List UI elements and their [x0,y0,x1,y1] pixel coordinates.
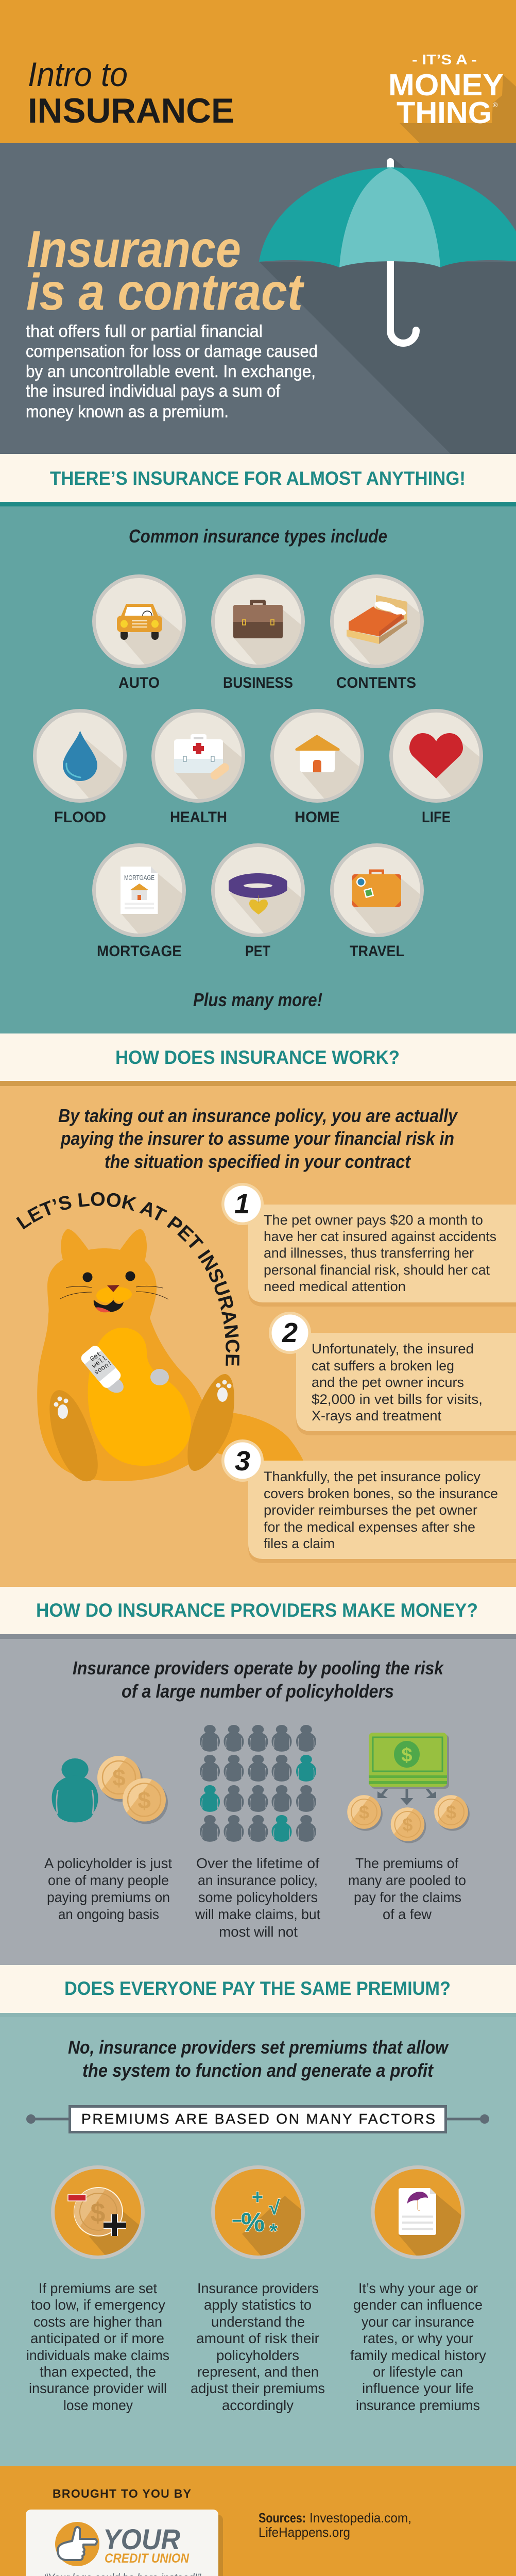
logo shadow [400,75,516,143]
icon: business [211,574,305,668]
text block: policyholder: A policyholder is just [44,1855,172,1871]
sources: Investopedia.com, [309,2510,411,2526]
heading band: does everyone pay the same [0,1965,516,2017]
text block: definition: the insured individual pays a sum of [26,381,281,400]
label: business: BUSINESS [223,674,293,691]
icon: mortgage [92,843,186,937]
text block: definition [26,321,318,421]
subheading: pooling the risk: Insurance providers operate by pooling the risk [73,1657,444,1679]
subheading: pooling the risk: of a large number of policyholders [122,1681,394,1702]
text block: statistics [191,2280,325,2413]
icon: life [389,709,483,803]
text block: pooled premiums: The premiums of [355,1855,458,1871]
logo: It's a Money Thing: ® [493,101,498,109]
icon: policyholder with coins: $ [112,1764,126,1791]
icon: money pool: $ [359,1802,369,1823]
subheading: taking out a policy: the situation specified in your contract [105,1151,411,1172]
text block: age and gender: your car insurance [362,2314,474,2330]
card: credit union logo: CREDIT UNION [105,2551,190,2566]
label: flood: FLOOD [54,809,106,826]
curved heading: let's look at pet insurance: LET’S LOOK AT PET INSURANCE [16,1192,239,1366]
icon: pet [211,843,305,937]
text block: age and gender [350,2280,486,2413]
card 3: reimbursement: 3 [235,1446,250,1477]
icon: money pool [347,1733,470,1843]
title: Intro to [28,55,128,93]
icon: math symbols: √ [269,2197,280,2219]
text block: premiums too low: too low, if emergency [31,2297,165,2313]
heading band: insurance for almost anything [0,454,516,506]
card 3: reimbursement: covers broken bones, so the insurance [264,1486,498,1501]
card 2: broken leg: and the pet owner incurs [312,1375,464,1390]
cast: get well soon: soon! [93,1359,114,1377]
sources: LifeHappens.org [259,2524,350,2540]
text block: policyholder: one of many people [48,1872,169,1888]
icon: policyholder with coins: $ [137,1787,151,1814]
panel: hero insurance is a contract [0,143,516,454]
panel: footer [0,2466,516,2576]
icon: mortgage: MORTGAGE [124,874,154,882]
heading band: how do providers make money [0,1587,516,1639]
card 1: pet owner pays: 1 [234,1189,250,1219]
label: contents: CONTENTS [336,674,416,691]
text block: premiums too low [26,2280,169,2413]
heading band: does everyone pay the same: DOES EVERYONE PAY THE SAME PREMIUM? [64,1978,451,1999]
card 3: reimbursement: for the medical expenses after she [264,1519,475,1535]
card 3: reimbursement: Thankfully, the pet insurance policy [264,1469,480,1484]
icon: money pool: $ [401,1744,412,1766]
card 2: broken leg: 2 [282,1317,298,1348]
icon: money pool: $ [402,1814,413,1835]
icon: money pool: $ [446,1802,456,1823]
label: health: HEALTH [170,809,227,826]
icon: health [151,709,245,803]
label: mortgage: MORTGAGE [97,943,182,960]
card 1: pet owner pays: need medical attention [264,1279,406,1294]
card: credit union logo: YOUR [103,2523,181,2555]
icon: grid of policyholders [200,1725,316,1842]
text block: policyholder [44,1855,172,1922]
panel: premiums [0,2017,516,2466]
text block: pooled premiums: pay for the claims [354,1889,461,1905]
heading: insurance is a contract: is a contract [26,263,304,321]
subheading: taking out a policy [58,1105,458,1172]
title: INSURANCE [28,91,234,130]
text block: age and gender: It’s why your age or [358,2280,478,2296]
text block: pooled premiums [348,1855,466,1922]
card 3: reimbursement: provider reimburses the pet owner [264,1502,477,1518]
text block: statistics: amount of risk their [196,2330,319,2346]
text block: lifetime of policy: most will not [219,1924,298,1940]
cast: get well soon: well [91,1354,108,1370]
card 1: pet owner pays: The pet owner pays $20 a month to [264,1212,483,1228]
text block: lifetime of policy: Over the lifetime of [196,1855,319,1871]
text block: policyholder: an ongoing basis [58,1906,159,1922]
text block: pooled premiums: of a few [383,1906,432,1922]
heading band: how does insurance work [0,1033,516,1086]
text block: statistics: accordingly [222,2397,294,2413]
text block: definition: money known as a premium. [26,402,229,421]
label: life: LIFE [422,809,451,826]
icon: contents [330,574,424,668]
card 2: broken leg: cat suffers a broken leg [312,1358,454,1374]
subheading: providers set premiums: the system to function and generate a profit [82,2060,434,2081]
text block: premiums too low: insurance provider will [29,2380,167,2396]
card 2: broken leg: X-rays and treatment [312,1408,441,1423]
text block: policyholder: paying premiums on [47,1889,170,1905]
icon: auto [92,574,186,668]
label: home: HOME [295,809,340,826]
logo: It's a Money Thing: MONEY [388,68,504,102]
text block: statistics: understand the [211,2314,305,2330]
heading band: insurance for almost anything: THERE’S INSURANCE FOR ALMOST ANYTHING! [50,468,466,489]
text block: statistics: Insurance providers [197,2280,319,2296]
text block: age and gender: influence your life [362,2380,474,2396]
card: credit union logo [26,2510,223,2576]
text block: age and gender: gender can influence [353,2297,483,2313]
subheading: common types: Common insurance types include [129,526,387,547]
card 3: reimbursement: files a claim [264,1536,335,1551]
subheading: taking out a policy: By taking out an insurance policy, you are actually [58,1105,458,1126]
icon: math symbols: − [232,2211,242,2231]
text block: premiums too low: than expected, the [40,2364,156,2380]
illustration: cat [37,1229,304,1481]
icon: umbrella [259,158,516,343]
text block: age and gender: insurance premiums [356,2397,480,2413]
label: travel: TRAVEL [350,943,404,960]
heading band: how do providers make money: HOW DO INSURANCE PROVIDERS MAKE MONEY? [36,1600,478,1621]
card 2: broken leg: Unfortunately, the insured [312,1341,474,1357]
text block: lifetime of policy: an insurance policy, [198,1872,318,1888]
note: plus many more: Plus many more! [193,989,322,1010]
icon: home [270,709,364,803]
panel: insurance types [0,506,516,1033]
text block: definition: that offers full or partial financial [26,321,263,341]
cast: get well soon: Get [89,1350,103,1363]
icon: math symbols: + [252,2187,263,2208]
text block: premiums too low: individuals make claims [26,2347,169,2363]
card 2: broken leg [269,1312,516,1435]
icon: policy document [371,2165,465,2259]
sources [259,2510,411,2540]
text block: lifetime of policy: some policyholders [198,1889,318,1905]
card 1: pet owner pays: personal financial risk, should her cat [264,1262,490,1278]
logo: It's a Money Thing: - IT’S A - [412,52,477,67]
subheading: taking out a policy: paying the insurer to assume your financial risk in [60,1128,454,1149]
icon: flood [33,709,127,803]
icon: math symbols: * [269,2220,278,2243]
text block: definition: compensation for loss or damage caused [26,342,318,361]
text block: statistics: represent, and then [197,2364,319,2380]
text block: premiums too low: costs are higher than [33,2314,162,2330]
heading: brought to you by: BROUGHT TO YOU BY [53,2487,191,2500]
icon: math symbols [211,2165,305,2259]
heading: insurance is a contract: Insurance [27,221,241,278]
card 1: pet owner pays: have her cat insured against accidents [264,1229,496,1244]
subheading: providers set premiums [68,2037,449,2081]
panel: how insurance works [0,1086,516,1587]
label: auto: AUTO [118,674,160,691]
text block: statistics: apply statistics to [204,2297,312,2313]
umbrella long shadow [259,262,516,454]
text block: statistics: policyholders [216,2347,299,2363]
cast: get well soon [79,1344,169,1396]
panel: header [0,0,516,143]
title [28,55,234,130]
card 1: pet owner pays [221,1183,516,1307]
text block: lifetime of policy [195,1855,320,1940]
text block: premiums too low: anticipated or if more [30,2330,164,2346]
sources: Sources: [259,2510,306,2526]
text block: age and gender: or lifestyle can [373,2364,463,2380]
subheading: providers set premiums: No, insurance providers set premiums that allow [68,2037,449,2058]
text block: statistics: adjust their premiums [191,2380,325,2396]
icon: math symbols: % [241,2208,265,2238]
text block: pooled premiums: many are pooled to [348,1872,466,1888]
icon: coin plus minus [51,2165,145,2259]
heading band: how does insurance work: HOW DOES INSURANCE WORK? [115,1047,400,1068]
card 1: pet owner pays: and illnesses, thus transferring her [264,1245,474,1261]
banner: many factors [26,2106,489,2132]
text block: age and gender: family medical history [350,2347,486,2363]
card 3: reimbursement [221,1439,516,1563]
panel: pooling risk [0,1639,516,1965]
text block: premiums too low: lose money [63,2397,133,2413]
heading: insurance is a contract [26,221,304,321]
text block: age and gender: rates, or why your [363,2330,473,2346]
label: pet: PET [245,943,270,960]
icon: travel [330,843,424,937]
text block: definition: by an uncontrollable event. In exchange, [26,362,316,381]
text block: premiums too low: If premiums are set [39,2280,157,2296]
logo: It's a Money Thing: THING [397,96,492,130]
logo: It's a Money Thing [388,52,504,130]
banner: many factors: PREMIUMS ARE BASED ON MANY FACTORS [81,2111,435,2127]
icon: policyholder with coins [52,1756,168,1824]
text block: lifetime of policy: will make claims, but [195,1906,320,1922]
subheading: pooling the risk [73,1657,444,1702]
icon: coin plus minus: $ [91,2198,106,2228]
card 2: broken leg: $2,000 in vet bills for visits, [312,1392,483,1407]
